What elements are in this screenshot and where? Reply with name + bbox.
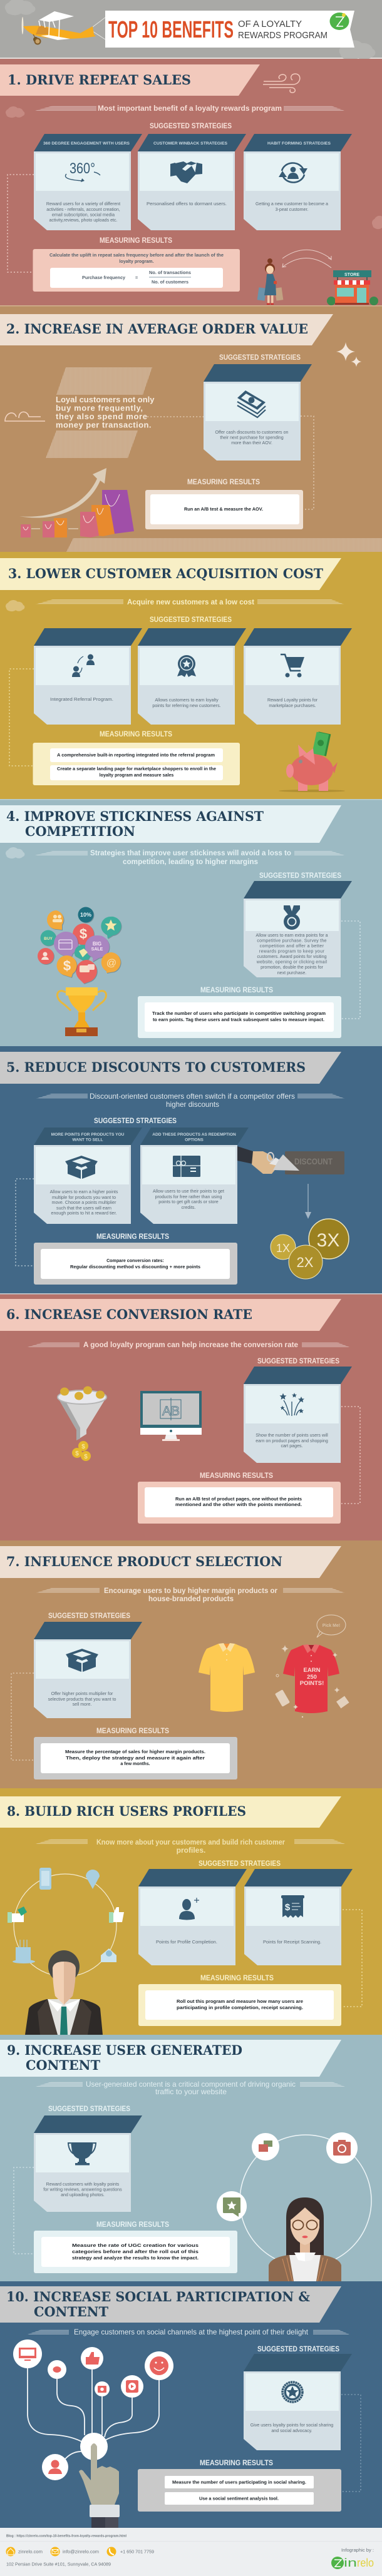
card: profile completion: Points for Profile Completion. <box>156 1940 217 1945</box>
measuring results box: Track the number of users who participate in competitive switching program <box>152 1011 326 1016</box>
logo: zinrelo <box>331 2557 374 2569</box>
measuring results box <box>34 2231 237 2273</box>
social icon: smile <box>145 2351 173 2380</box>
illustration: funnel with coins: $ <box>84 1453 88 1460</box>
icon: camera <box>326 2132 358 2164</box>
contact details: 102 Persian Drive Suite #101, Sunnyvale, CA 94089 <box>6 2562 111 2567</box>
card: social sharing points: Give users loyalty points for social sharing <box>250 2423 333 2428</box>
subtitle: REWARDS PROGRAM <box>238 30 328 41</box>
card: reward ugc: for writing reviews, answering questions <box>43 2187 122 2192</box>
measuring results box <box>138 1482 341 1524</box>
card: earn points for referring: points for referring new customers. <box>152 703 221 708</box>
card: reward ugc <box>34 2115 142 2212</box>
social icon: chat <box>48 2360 66 2379</box>
section 8: build rich users profiles <box>0 1788 382 2035</box>
tagline <box>36 1092 345 1109</box>
illustration: red shirt: 250 <box>307 1674 317 1681</box>
suggested strategies label: SUGGESTED STRATEGIES <box>150 616 232 624</box>
measuring results box: Roll out this program and measure how many users are <box>177 1999 303 2004</box>
illustration: store <box>327 270 378 305</box>
connector <box>8 175 34 272</box>
card: receipt scanning: Points for Receipt Scanning. <box>263 1940 321 1945</box>
section 7: influence product selection <box>0 1540 382 1788</box>
banner <box>105 11 354 48</box>
card: extra points for competitive purchase: website, opening or clicking email <box>256 960 327 965</box>
measuring results box: Regular discounting method vs discounting + more points <box>70 1265 200 1270</box>
measuring results label: MEASURING RESULTS <box>200 987 273 994</box>
section 6: increase conversion rate <box>0 1293 382 1540</box>
measuring results box <box>34 1243 237 1285</box>
illustration: store: STORE <box>344 273 359 277</box>
icon: star badge <box>282 2382 302 2402</box>
card: 360 degree engagement: activity,reviews, photo uploads etc. <box>49 218 118 223</box>
icon: thumb and cash left <box>8 1907 27 1923</box>
card: redemption options: products for free rather than using <box>155 1194 222 1199</box>
subtitle <box>238 19 328 41</box>
card: customer winback <box>138 134 246 230</box>
illustration: red shirt: POINTS! <box>300 1680 324 1687</box>
card: cash discounts: their next purchase for spending <box>220 435 284 440</box>
heading band 8 <box>0 1796 341 1828</box>
social icon: play <box>121 2375 143 2398</box>
suggested strategies label: SUGGESTED STRATEGIES <box>257 2346 339 2353</box>
illustration: points multiplier coins: 1X <box>276 1242 290 1255</box>
card: earn points for referring <box>138 628 246 725</box>
callout: pick me: Pick Me! <box>323 1624 340 1628</box>
illustration: shopping bags <box>21 490 134 537</box>
card: more points: enough points to hit a reward tier. <box>51 1211 116 1216</box>
suggested strategies label: SUGGESTED STRATEGIES <box>48 2105 130 2113</box>
tagline: Know more about your customers and build rich customer <box>96 1838 285 1846</box>
card: 360 degree engagement: activities - referrals, account creation, <box>46 207 120 212</box>
blog link: Blog : https://zinrelo.com/top-10-benefits-from-loyalty-rewards-program.html <box>6 2534 126 2538</box>
icon: star review <box>217 2191 247 2221</box>
illustration: marketing bubbles: BIG <box>93 941 101 947</box>
cloud <box>6 847 24 858</box>
illustration: marketing bubbles: $ <box>63 958 71 974</box>
heading band 3: 3. LOWER CUSTOMER ACQUISITION COST <box>8 566 323 581</box>
card: social sharing points: and social advocacy. <box>271 2428 312 2433</box>
heading band 10 <box>0 2286 341 2323</box>
card: more points: such that the users will earn <box>56 1206 111 1211</box>
heading band 1: 1. DRIVE REPEAT SALES <box>8 72 191 88</box>
title: top 10 benefits: TOP 10 BENEFITS <box>108 17 234 43</box>
measuring results box: strategy and analyze the results to know the impact. <box>72 2256 199 2261</box>
illustration: marketing bubbles: @ <box>106 958 116 969</box>
icon: wind <box>263 74 300 93</box>
connector <box>16 1179 34 1266</box>
card: profile completion <box>138 1869 247 1965</box>
illustration: discount tag with scissors: DISCOUNT <box>294 1156 333 1166</box>
pointing hand <box>79 2443 120 2528</box>
heading band 10: 10. INCREASE SOCIAL PARTICIPATION & <box>6 2289 310 2304</box>
connector <box>341 1407 360 1504</box>
tagline: Engage customers on social channels at the highest point of their delight <box>74 2328 309 2336</box>
arrow: growth <box>19 468 106 518</box>
card: cash discounts: Offer cash discounts to customers on <box>215 430 289 435</box>
card: cash discounts: more than their AOV. <box>231 440 272 445</box>
measuring results label: MEASURING RESULTS <box>200 1975 274 1982</box>
icon: box <box>65 1156 98 1179</box>
card: redemption options: points to get gift cards or store <box>158 1199 219 1204</box>
card: more points: multiple for products you want to <box>52 1195 116 1200</box>
figure: woman <box>269 2197 341 2281</box>
heading band 3 <box>0 558 341 590</box>
measuring results label: MEASURING RESULTS <box>96 1233 169 1241</box>
striped panels <box>46 367 382 552</box>
heading band 4: COMPETITION <box>25 823 135 839</box>
icon: add user <box>179 1898 199 1920</box>
illustration: A/B test monitor <box>140 1391 202 1441</box>
card: extra points for competitive purchase <box>244 881 352 977</box>
callout: loyal customers: Loyal customers not only <box>56 395 155 404</box>
measuring results box: categories before and after the roll out of this <box>72 2249 199 2254</box>
icon: phone <box>39 1868 51 1890</box>
decorative clouds <box>5 0 375 60</box>
logo: zinrelo z <box>329 13 349 30</box>
icon: cycle user <box>279 163 307 182</box>
card: referral program <box>34 628 142 725</box>
tagline <box>36 2080 345 2096</box>
section: header <box>0 0 382 60</box>
card: more points: move. Choose a points multiplier <box>52 1200 116 1205</box>
measuring results box <box>138 996 341 1038</box>
heading band 9: 9. INCREASE USER GENERATED <box>7 2042 242 2058</box>
tagline: house-branded products <box>148 1594 234 1603</box>
connector <box>343 1910 362 2007</box>
illustration: marketing bubbles: 10% <box>80 912 91 918</box>
measuring results box: loyalty program. <box>119 259 154 264</box>
social icon: user <box>42 2454 68 2480</box>
formula <box>82 270 191 285</box>
clouds <box>6 106 382 229</box>
card: higher points multiplier: sell more. <box>73 1702 91 1707</box>
icon: location pin <box>86 1870 100 1889</box>
connector <box>9 669 34 766</box>
measuring results box <box>145 490 303 529</box>
tagline: A good loyalty program can help increase the conversion rate <box>83 1340 298 1349</box>
illustration: funnel with coins: $ <box>81 1443 85 1450</box>
icon: cart <box>281 654 304 677</box>
suggested strategies label: SUGGESTED STRATEGIES <box>94 1117 177 1125</box>
icon: 360: 360° <box>70 160 95 177</box>
heading band 7 <box>0 1546 341 1578</box>
connector <box>341 921 360 1019</box>
illustration: marketing bubbles: SALE <box>91 947 103 952</box>
icon: thumb right <box>109 1907 124 1923</box>
measuring results box <box>138 2469 341 2512</box>
measuring results box: Create a separate landing page for marketplace shoppers to enroll in the <box>57 766 216 771</box>
connector <box>11 1673 34 1760</box>
card: redemption options: ADD THESE PRODUCTS AS REDEMPTION <box>152 1133 236 1137</box>
heading band 5: 5. REDUCE DISCOUNTS TO CUSTOMERS <box>6 1059 306 1075</box>
card: reward ugc: Reward customers with loyalty points <box>46 2182 120 2187</box>
measuring results box: Run an A/B test & measure the AOV. <box>184 507 263 512</box>
icon: chat bubbles <box>252 2133 279 2161</box>
measuring results label: MEASURING RESULTS <box>200 2460 273 2467</box>
tagline: User-generated content is a critical component of driving organic <box>86 2080 296 2089</box>
formula: Purchase frequency <box>82 275 125 280</box>
tagline: competition, leading to higher margins <box>123 857 258 866</box>
measuring results box: Then, deploy the strategy and measure it again after <box>66 1756 205 1761</box>
card: extra points for competitive purchase: competition and offer a better <box>260 944 324 949</box>
illustration: A/B test monitor: AB <box>162 1404 180 1418</box>
decorations around shirt <box>275 1645 349 1718</box>
measuring results box <box>33 249 240 292</box>
icon: trophy <box>68 2142 96 2165</box>
icon: cake <box>13 1940 35 1963</box>
illustration: businessman <box>25 1950 103 2035</box>
heading band 8: 8. BUILD RICH USERS PROFILES <box>7 1803 246 1819</box>
card: more points <box>34 1128 142 1224</box>
measuring results box: Calculate the uplift in repeat sales frequency before and after the launch of the <box>49 253 224 258</box>
icon: medal <box>284 905 300 930</box>
illustration: shopper <box>257 258 283 305</box>
formula: = <box>135 275 138 280</box>
card: extra points for competitive purchase: competitive purchase. Survey the <box>257 939 327 944</box>
contact details: +1 650 701 7759 <box>120 2549 154 2554</box>
measuring results label: MEASURING RESULTS <box>96 1728 169 1735</box>
suggested strategies label: SUGGESTED STRATEGIES <box>219 354 301 362</box>
card: marketplace points: marketplace purchases. <box>269 703 316 708</box>
illustration: red shirt <box>283 1644 339 1713</box>
callout: loyal customers: buy more frequently, <box>56 403 143 413</box>
section 4: improve stickiness against competition <box>0 799 382 1046</box>
heading band 5 <box>0 1052 341 1084</box>
contact details: zinrelo.com <box>18 2549 43 2554</box>
card: 360 degree engagement <box>34 134 142 230</box>
measuring results box: mentioned and the other with the points mentioned. <box>175 1502 302 1507</box>
card: more points: MORE POINTS FOR PRODUCTS YOU <box>51 1133 125 1137</box>
illustration: points multiplier coins: 2X <box>297 1255 314 1270</box>
illustration: red shirt: EARN <box>304 1667 321 1674</box>
icon: wind <box>5 412 45 421</box>
illustration: social tree with pointing hand <box>13 2339 173 2528</box>
card: show points: earn on product pages and shopping <box>256 1438 328 1443</box>
heading band 10: CONTENT <box>34 2304 108 2319</box>
card: show points <box>244 1367 352 1463</box>
measuring results box: to earn points. Tag these users and track subsequent sales to measure impact. <box>153 1017 324 1022</box>
card: referral program: Integrated Referral Program. <box>50 697 113 702</box>
illustration: biplane <box>22 11 105 44</box>
card: habit forming: HABIT FORMING STRATEGIES <box>267 141 331 146</box>
illustration: funnel with coins <box>58 1387 106 1461</box>
footer <box>0 2528 382 2576</box>
heading band 7: 7. INFLUENCE PRODUCT SELECTION <box>6 1554 282 1569</box>
arrow: down <box>305 1184 311 1219</box>
icon: envelope <box>101 1948 116 1962</box>
card: higher points multiplier: Offer higher points multiplier for <box>51 1691 113 1696</box>
suggested strategies label: SUGGESTED STRATEGIES <box>48 1612 130 1620</box>
measuring results box: Measure the rate of UGC creation for various <box>72 2243 199 2248</box>
subtitle: OF A LOYALTY <box>238 19 302 29</box>
measuring results box: participating in profile completion, receipt scanning. <box>177 2005 303 2010</box>
heading band 9: CONTENT <box>26 2057 100 2073</box>
card: cash discounts <box>204 364 312 461</box>
card: 360 degree engagement: email subscription, social media <box>52 213 115 218</box>
illustration: points multiplier coins <box>271 1219 349 1279</box>
callout: loyal customers: they also spend more <box>56 412 148 421</box>
icon: award ribbon <box>177 655 196 677</box>
heading band 4: 4. IMPROVE STICKINESS AGAINST <box>6 808 264 824</box>
tagline: Acquire new customers at a low cost <box>127 598 254 606</box>
card: reward ugc: and uploading photos. <box>61 2192 105 2197</box>
callout: pick me <box>317 1615 346 1637</box>
measuring results box: Use a social sentiment analysis tool. <box>199 2497 279 2502</box>
measuring results box: loyalty program and measure sales <box>100 773 173 778</box>
heading band 4 <box>0 805 341 843</box>
heading band 9 <box>0 2040 341 2077</box>
section 1: drive repeat sales <box>0 59 382 305</box>
card: show points: cart pages. <box>281 1443 303 1448</box>
formula: No. of customers <box>152 280 188 285</box>
suggested strategies label: SUGGESTED STRATEGIES <box>259 872 341 880</box>
illustration: trophy <box>58 987 106 1036</box>
card: extra points for competitive purchase: promotion, double the points for <box>261 965 324 970</box>
icon: handshake <box>170 161 202 183</box>
measuring results box: Measure the percentage of sales for higher margin products. <box>65 1749 205 1754</box>
social icon: thumb <box>81 2347 103 2370</box>
measuring results label: MEASURING RESULTS <box>200 1472 273 1480</box>
tagline <box>35 104 344 113</box>
logo: zinrelo: relo <box>357 2557 374 2569</box>
measuring results box: Compare conversion rates: <box>106 1258 164 1263</box>
tagline <box>36 1586 345 1603</box>
illustration: discount tag with scissors <box>237 1146 344 1174</box>
card: customer winback: CUSTOMER WINBACK STRATEGIES <box>153 141 228 146</box>
card: redemption options: OPTIONS <box>185 1138 204 1143</box>
tagline: traffic to your website <box>155 2087 227 2096</box>
illustration: marketing bubbles: $ <box>80 926 87 942</box>
card: habit forming: Getting a new customer to become a <box>256 201 328 206</box>
tagline: Encourage users to buy higher margin products or <box>104 1586 277 1595</box>
icon: fireworks <box>279 1393 304 1416</box>
tagline: Most important benefit of a loyalty rewards program <box>98 104 282 113</box>
measuring results box <box>33 743 240 785</box>
contact icons <box>6 2547 116 2557</box>
card: higher points multiplier: selective products that you want to <box>48 1697 116 1702</box>
sparkles <box>336 342 361 367</box>
social icon: monitor <box>13 2339 42 2368</box>
card: marketplace points <box>244 628 352 725</box>
tagline: Discount-oriented customers often switch if a competitor offers <box>90 1092 295 1101</box>
connectors <box>144 416 314 509</box>
tagline: higher discounts <box>166 1100 219 1109</box>
icon: money stack <box>237 390 266 417</box>
card: customer winback: Personalised offers to dormant users. <box>147 201 227 206</box>
tagline: profiles. <box>177 1846 205 1855</box>
callout: loyal customers: money per transaction. <box>56 420 152 429</box>
measuring results box: A comprehensive built-in reporting integrated into the referral program <box>57 753 215 758</box>
illustration: funnel with coins: $ <box>75 1450 79 1457</box>
contact details: Infographic by : <box>341 2547 374 2553</box>
tagline <box>35 848 344 866</box>
illustration: yellow shirt <box>199 1643 255 1712</box>
measuring results label: MEASURING RESULTS <box>96 2221 169 2229</box>
heading band 2: 2. INCREASE IN AVERAGE ORDER VALUE <box>6 321 308 337</box>
icon: receipt <box>281 1895 304 1918</box>
heading band 6: 6. INCREASE CONVERSION RATE <box>6 1306 252 1322</box>
section 10: increase social participation and content <box>0 2281 382 2528</box>
heading band 1 <box>0 64 260 96</box>
card: earn points for referring: Allows customers to earn loyalty <box>155 698 219 703</box>
card: extra points for competitive purchase: rewards program to keep your <box>259 949 324 954</box>
icon: receipt: $ <box>285 1902 291 1913</box>
formula: No. of transactions <box>149 270 191 275</box>
contact details <box>6 2547 374 2567</box>
section 2: increase in average order value <box>0 305 382 552</box>
measuring results label: MEASURING RESULTS <box>187 479 260 486</box>
icon: gift card <box>173 1156 200 1177</box>
measuring results box: a few months. <box>120 1761 150 1766</box>
illustration: marketing bubbles: BUY <box>44 937 53 941</box>
card: higher points multiplier <box>34 1622 142 1718</box>
icon: 360 <box>65 160 100 182</box>
icon: referral <box>72 654 95 677</box>
card: 360 degree engagement: Reward users for a variety of different <box>46 201 120 206</box>
suggested strategies label: SUGGESTED STRATEGIES <box>199 1860 281 1868</box>
card: extra points for competitive purchase: next purchase. <box>277 970 306 975</box>
card: redemption options <box>140 1128 249 1224</box>
social icon: camera <box>95 2381 110 2396</box>
tagline <box>35 598 344 606</box>
card: redemption options: credits. <box>182 1205 195 1210</box>
card: more points: Allow users to earn a higher points <box>50 1189 118 1194</box>
card: extra points for competitive purchase: Allow users to earn extra points for a <box>256 933 328 938</box>
card: extra points for competitive purchase: customers. Award points for visiting <box>257 954 327 959</box>
section 9: increase user generated content <box>0 2035 382 2281</box>
card: habit forming <box>244 134 352 230</box>
heading band 6 <box>0 1299 341 1331</box>
tagline <box>28 1340 349 1349</box>
illustration: piggy bank <box>279 731 345 792</box>
illustration: marketing bubbles <box>38 907 121 984</box>
card: 360 degree engagement: 360 DEGREE ENGAGEMENT WITH USERS <box>43 141 130 146</box>
logo: zinrelo: in <box>344 2557 357 2569</box>
card: marketplace points: Reward Loyalty points for <box>267 698 318 703</box>
arrows between shopper and store <box>282 250 331 268</box>
suggested strategies label: SUGGESTED STRATEGIES <box>257 1358 339 1365</box>
illustration: woman with content ring <box>217 2132 371 2281</box>
measuring results label: MEASURING RESULTS <box>100 731 172 738</box>
section 3: lower customer acquisition cost <box>0 552 382 799</box>
measuring results label: MEASURING RESULTS <box>100 237 172 245</box>
measuring results box: Run an A/B test of product pages, one without the points <box>175 1497 302 1502</box>
heading band 2 <box>0 314 333 345</box>
card: receipt scanning <box>244 1869 353 1965</box>
card: redemption options: Allow users to use their points to get <box>153 1189 224 1194</box>
tagline: Strategies that improve user stickiness will avoid a loss to <box>90 848 291 857</box>
tagline <box>36 1838 345 1855</box>
card: show points: Show the number of points users will <box>256 1433 328 1438</box>
measuring results box <box>34 1737 237 1779</box>
card: habit forming: 3-peat customer. <box>276 207 308 212</box>
icon: box <box>66 1649 98 1672</box>
illustration: user profile ring <box>8 1868 124 1977</box>
connector <box>14 2167 34 2254</box>
cloud <box>6 600 24 611</box>
contact details: info@zinrelo.com <box>63 2549 99 2554</box>
measuring results box <box>138 1984 341 2026</box>
section 5: reduce discounts to customers <box>0 1046 382 1293</box>
card: social sharing points <box>244 2354 352 2450</box>
card: more points: WANT TO SELL <box>73 1138 103 1143</box>
measuring results box: Measure the number of users participating in social sharing. <box>172 2480 306 2485</box>
illustration: points multiplier coins: 3X <box>317 1230 339 1251</box>
connector <box>341 2395 361 2492</box>
suggested strategies label: SUGGESTED STRATEGIES <box>150 123 232 130</box>
